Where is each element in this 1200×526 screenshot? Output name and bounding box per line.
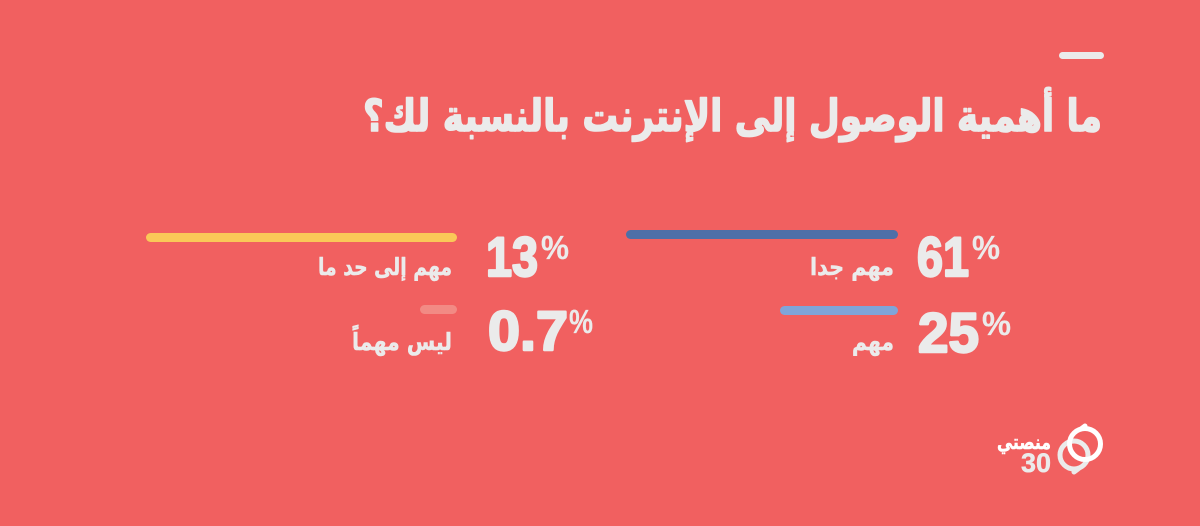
label: important: مهم [852, 328, 894, 356]
logo number: 30 [1021, 448, 1051, 478]
bar: 0.7% [420, 305, 457, 314]
value: 13%: 13 [486, 225, 538, 288]
title accent bar [1059, 52, 1104, 59]
value: 0.7%: 0.7 [488, 299, 568, 362]
logo text: منصتي [997, 430, 1051, 455]
stat: somewhat important 13% [146, 225, 569, 288]
logo [997, 426, 1100, 478]
value: 61%: % [972, 229, 1000, 266]
bar: 25% [780, 306, 898, 315]
label: somewhat important: مهم إلى حد ما [318, 253, 452, 281]
value: 25%: 25 [918, 301, 979, 364]
stat: important 25% [780, 301, 1011, 364]
value: 13%: % [541, 229, 569, 266]
label: not important: ليس مهماً [352, 325, 452, 356]
bar: 13% [146, 233, 457, 242]
value: 61%: 61 [917, 225, 969, 288]
value: 0.7%: % [569, 303, 593, 340]
value: 25%: % [982, 305, 1011, 342]
logo icon: interlocking rings [1060, 426, 1100, 472]
stat: not important 0.7% [352, 299, 593, 362]
label: very important: مهم جدا [810, 253, 894, 281]
stat: very important 61% [626, 225, 1000, 288]
value: 25% [918, 301, 1011, 364]
bar: 61% [626, 230, 898, 239]
